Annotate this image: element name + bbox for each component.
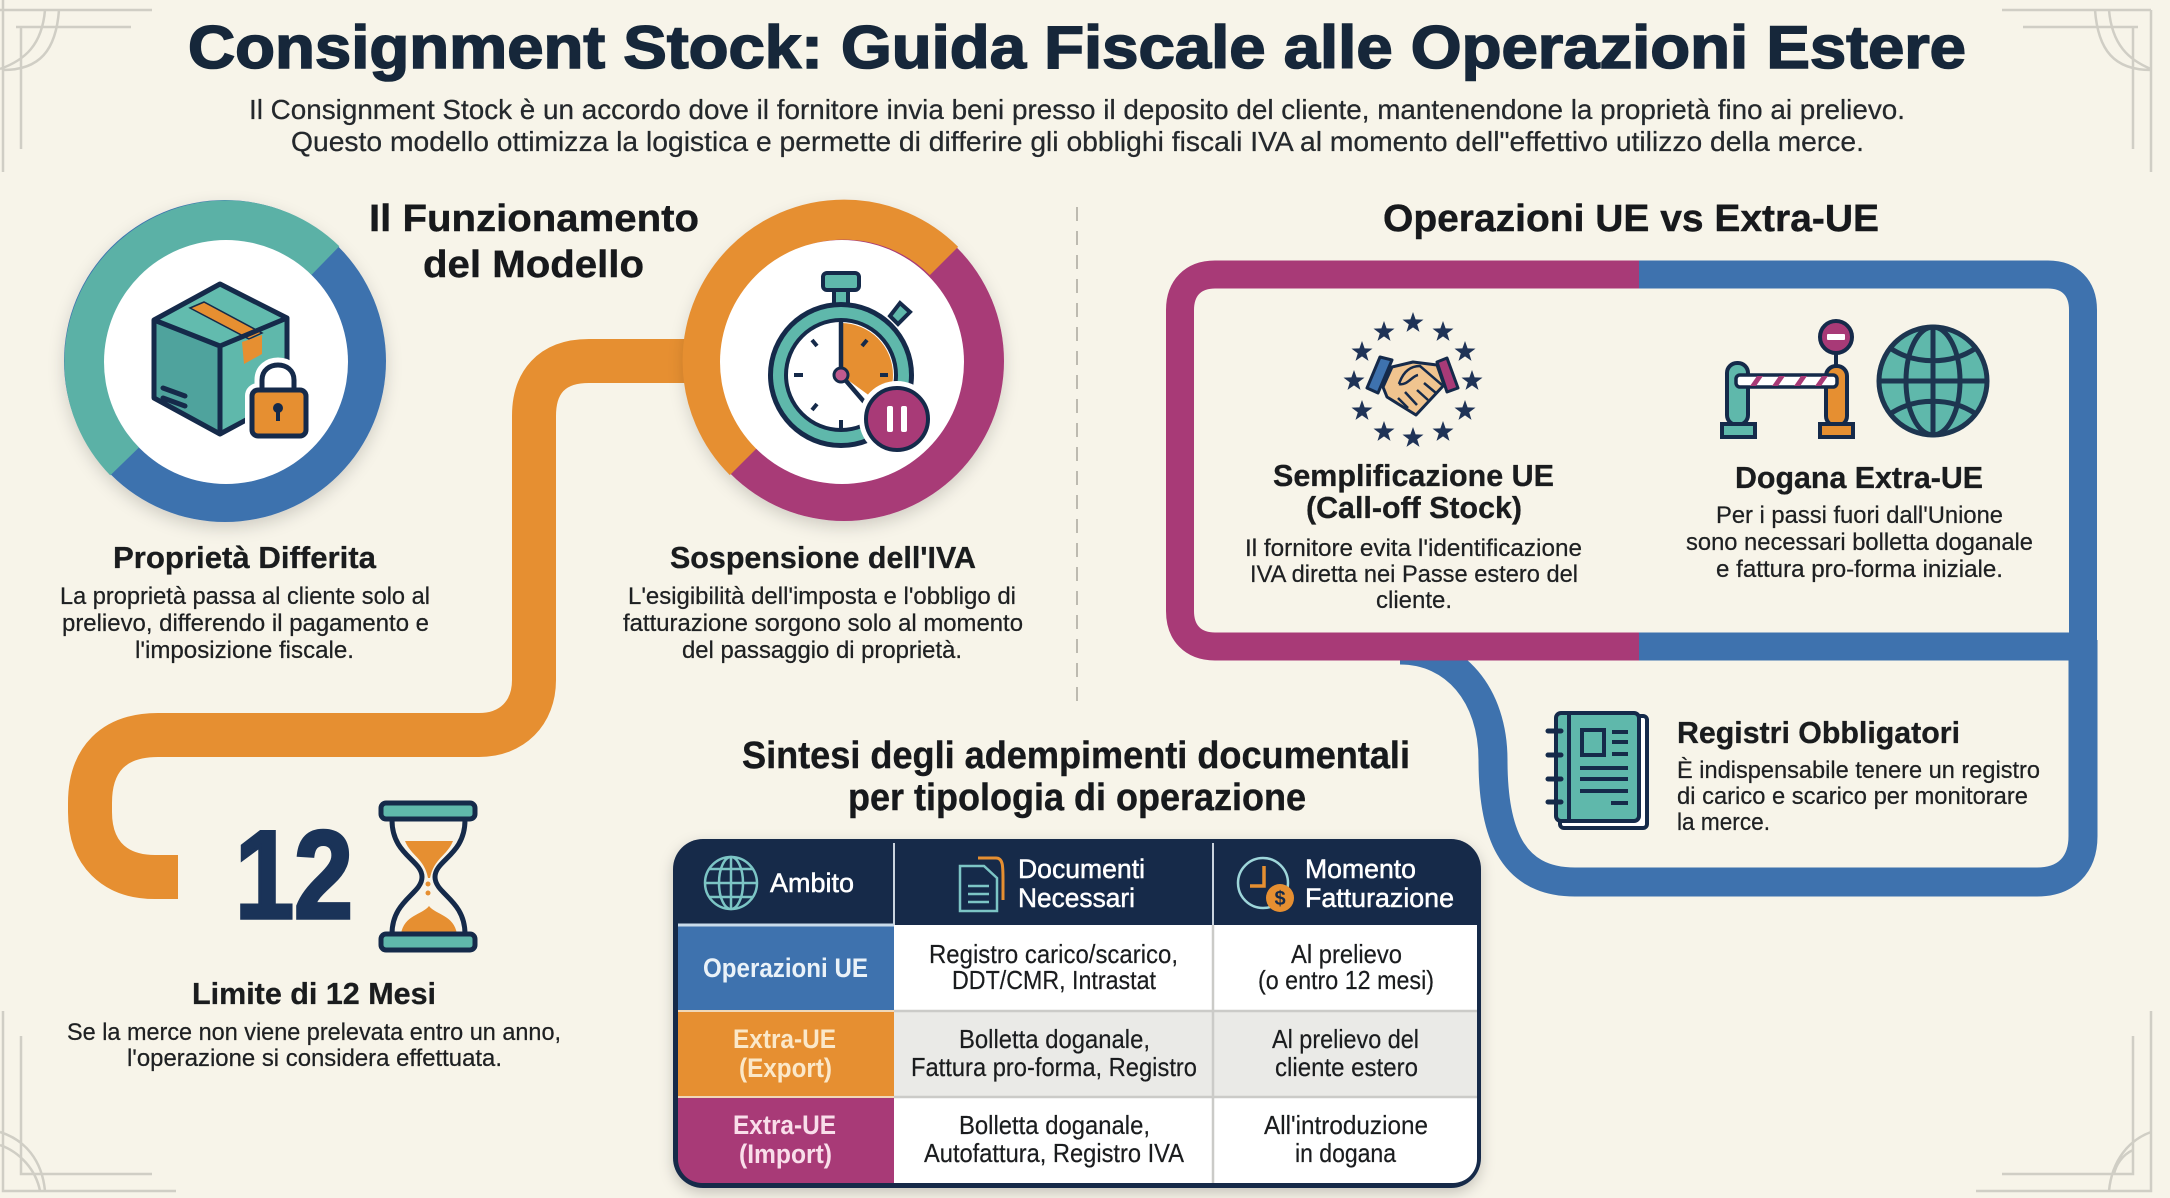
text block: semplificazione UE: Semplificazione UE xyxy=(1273,458,1554,493)
text block: limite 12 mesi: Limite di 12 Mesi xyxy=(192,976,436,1011)
circle: sospensione IVA xyxy=(684,201,1004,521)
table row: extra-UE import: (Import) xyxy=(739,1139,832,1169)
text block: limite 12 mesi: l'operazione si considera effettuata. xyxy=(127,1045,502,1072)
table row: operazioni UE: Registro carico/scarico, xyxy=(929,939,1178,969)
table row: extra-UE import: in dogana xyxy=(1295,1138,1396,1168)
table row: extra-UE export: cliente estero xyxy=(1275,1052,1418,1082)
text block: sospensione IVA: fatturazione sorgono solo al momento xyxy=(623,610,1023,637)
text block: dogana extra-UE xyxy=(1686,460,2033,583)
table heading: per tipologia di operazione xyxy=(848,777,1306,819)
table header: documenti xyxy=(960,854,1145,913)
table row: extra-UE import: Extra-UE xyxy=(733,1110,836,1140)
table header: documenti: Documenti xyxy=(1018,854,1145,884)
text block: dogana extra-UE: Dogana Extra-UE xyxy=(1735,460,1983,495)
table header: ambito: Ambito xyxy=(770,868,854,898)
orange connector path xyxy=(90,361,720,877)
section heading: funzionamento xyxy=(369,198,699,286)
text block: dogana extra-UE: e fattura pro-forma iniziale. xyxy=(1716,556,2003,583)
section heading: funzionamento: del Modello xyxy=(423,244,644,286)
table row: operazioni UE: DDT/CMR, Intrastat xyxy=(952,965,1157,995)
table row: extra-UE export: Al prelievo del xyxy=(1272,1024,1419,1054)
table row: operazioni UE: (o entro 12 mesi) xyxy=(1258,965,1434,995)
section heading: UE vs Extra-UE: Operazioni UE vs Extra-UE xyxy=(1383,198,1879,240)
text block: proprieta differita: Proprietà Differita xyxy=(113,540,377,575)
icon: register notebook xyxy=(1548,713,1647,828)
text block: dogana extra-UE: sono necessari bolletta doganale xyxy=(1686,529,2033,556)
title: Consignment Stock: Guida Fiscale alle Operazioni Estere xyxy=(188,14,1966,81)
text block: registri obbligatori: di carico e scarico per monitorare xyxy=(1677,783,2028,810)
intro text: Il Consignment Stock è un accordo dove il fornitore invia beni presso il deposito del cliente, mantenendone la proprietà fino ai prelievo. xyxy=(249,94,1905,125)
table row: operazioni UE: Al prelievo xyxy=(1291,939,1402,969)
panel: UE vs Extra-UE frame xyxy=(1180,274,2083,882)
icon: box with lock xyxy=(154,284,306,436)
number 12: 12 xyxy=(235,806,353,945)
table row: extra-UE export: Bolletta doganale, xyxy=(959,1024,1150,1054)
table heading xyxy=(742,735,1410,819)
intro text xyxy=(249,94,1905,157)
text block: registri obbligatori: la merce. xyxy=(1677,809,1770,836)
text block: semplificazione UE xyxy=(1245,458,1582,614)
table row: extra-UE import: Bolletta doganale, xyxy=(959,1110,1150,1140)
text block: proprieta differita xyxy=(60,540,430,664)
text block: sospensione IVA: del passaggio di proprietà. xyxy=(682,637,962,664)
section heading: funzionamento: Il Funzionamento xyxy=(369,198,699,240)
icon: hourglass xyxy=(381,803,475,950)
decorative corner: bottom left xyxy=(0,1011,176,1191)
intro text: Questo modello ottimizza la logistica e permette di differire gli obblighi fiscali IVA al momento dell"effettivo utilizzo della merce. xyxy=(291,126,1864,157)
table row: extra-UE export: (Export) xyxy=(739,1053,832,1083)
icon: EU stars handshake xyxy=(1344,312,1482,447)
text block: semplificazione UE: Il fornitore evita l'identificazione xyxy=(1245,535,1582,562)
table row: extra-UE export: Fattura pro-forma, Registro xyxy=(911,1052,1197,1082)
icon: customs barrier xyxy=(1722,321,1853,437)
text block: dogana extra-UE: Per i passi fuori dall'Unione xyxy=(1716,502,2003,529)
text block: semplificazione UE: IVA diretta nei Passe estero del xyxy=(1250,561,1578,588)
table header: momento: Fatturazione xyxy=(1305,883,1454,913)
table header: momento: $ xyxy=(1274,888,1286,910)
circle: proprieta differita xyxy=(64,200,386,522)
table header: momento xyxy=(1238,854,1454,913)
text block: sospensione IVA xyxy=(623,540,1023,664)
text block: registri obbligatori xyxy=(1677,715,2040,836)
text block: proprieta differita: l'imposizione fiscale. xyxy=(135,637,354,664)
table header: documenti: Necessari xyxy=(1018,883,1135,913)
text block: registri obbligatori: Registri Obbligatori xyxy=(1677,715,1960,750)
decorative corner: bottom right xyxy=(1976,1011,2151,1191)
text block: semplificazione UE: (Call-off Stock) xyxy=(1306,490,1522,525)
table: adempimenti documentali xyxy=(673,839,1481,1188)
table header: ambito xyxy=(705,857,854,909)
text block: limite 12 mesi xyxy=(67,976,561,1072)
vertical dashed divider xyxy=(1076,207,1078,701)
table row: extra-UE import: Autofattura, Registro IVA xyxy=(924,1138,1185,1168)
table row: extra-UE export: Extra-UE xyxy=(733,1024,836,1054)
table row: operazioni UE: Operazioni UE xyxy=(703,953,868,983)
icon: stopwatch with pause xyxy=(768,273,935,457)
table header: momento: Momento xyxy=(1305,854,1416,884)
table heading: Sintesi degli adempimenti documentali xyxy=(742,735,1410,777)
decorative corner: top right xyxy=(2002,10,2151,172)
text block: sospensione IVA: L'esigibilità dell'imposta e l'obbligo di xyxy=(628,583,1016,610)
text block: limite 12 mesi: Se la merce non viene prelevata entro un anno, xyxy=(67,1019,561,1046)
text block: registri obbligatori: È indispensabile tenere un registro xyxy=(1677,757,2040,784)
decorative corner: top left xyxy=(0,0,152,172)
text block: sospensione IVA: Sospensione dell'IVA xyxy=(670,540,976,575)
table row: extra-UE import: All'introduzione xyxy=(1264,1110,1428,1140)
table row: extra-UE export xyxy=(733,1024,1419,1083)
icon: globe xyxy=(1879,327,1987,435)
text block: semplificazione UE: cliente. xyxy=(1376,587,1452,614)
table row: operazioni UE xyxy=(703,939,1434,995)
table row: extra-UE import xyxy=(733,1110,1428,1169)
text block: proprieta differita: La proprietà passa al cliente solo al xyxy=(60,583,430,610)
text block: proprieta differita: prelievo, differendo il pagamento e xyxy=(62,610,429,637)
